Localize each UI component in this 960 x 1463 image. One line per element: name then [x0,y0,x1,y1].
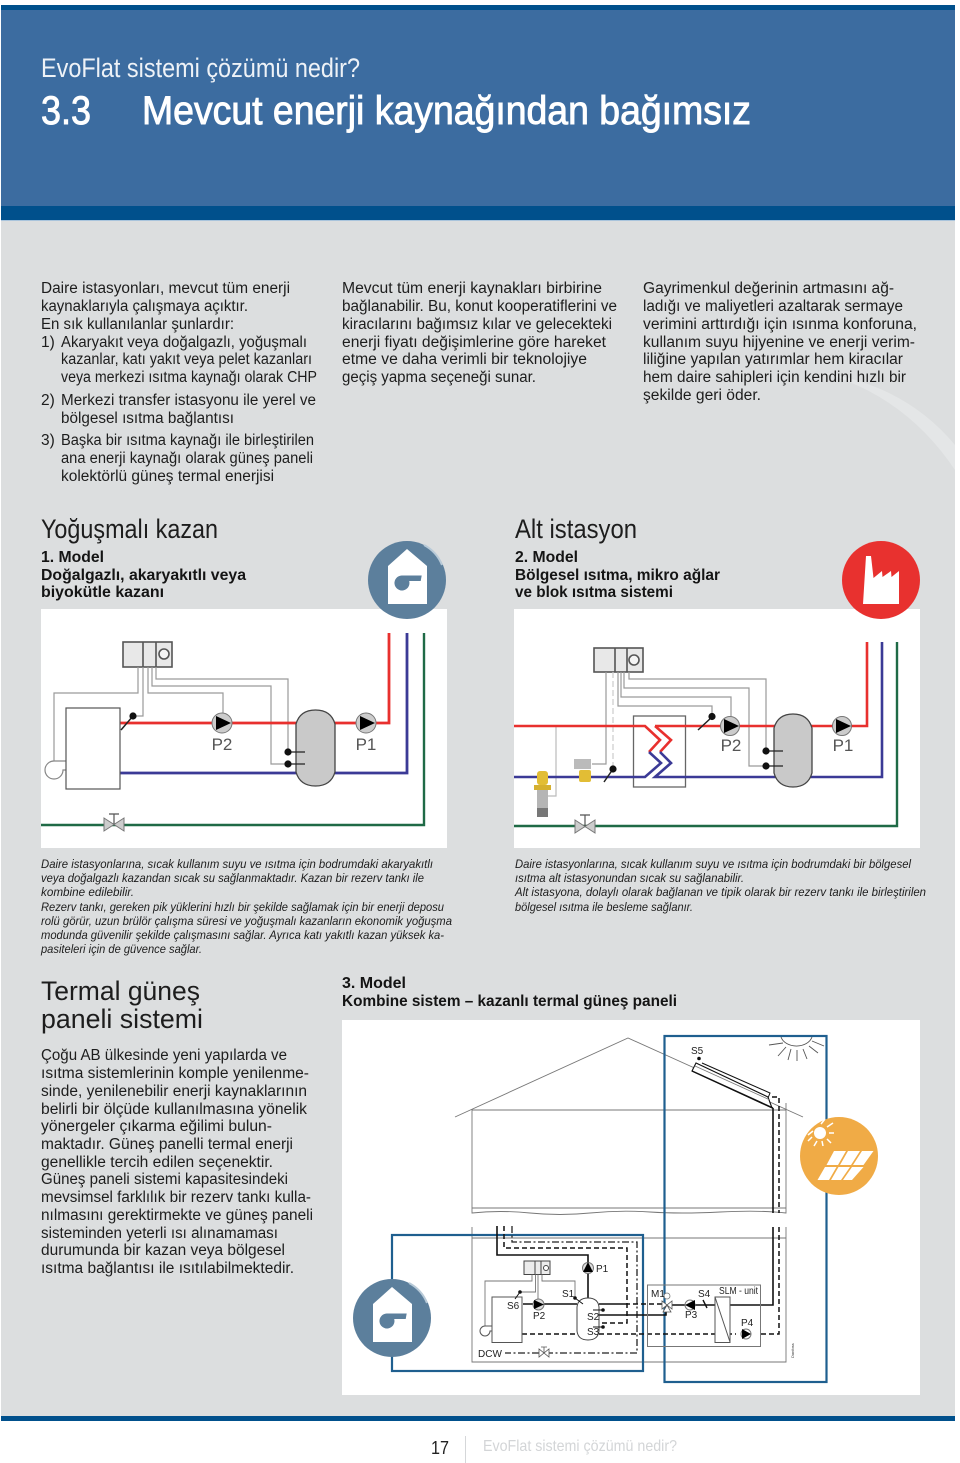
footer divider and running title: EvoFlat sistemi çözümü nedir? [483,1438,677,1455]
storage tank [762,714,812,787]
text block: model 2 description: ısıtma alt istasyonundan sıcak su sağlanabilir. [515,871,744,885]
text block: column 3: hem daire sahipleri için kendini hızlı bir [643,369,906,386]
footer band [1,1416,955,1421]
diagram labels: P2 [533,1311,546,1322]
heading: Termal güneş paneli sistemi: paneli sistemi [41,1004,203,1034]
pump P1 [832,716,853,755]
boiler circuit pipes [497,1226,736,1353]
pump P1: P1 [356,735,376,754]
text block: column 1: 1) [41,334,55,351]
diagram labels: P3 [685,1310,698,1321]
header band [1,5,955,221]
heading: Yoğuşmalı kazan: Yoğuşmalı kazan [41,514,218,544]
cold water pipe [514,642,897,826]
text block: model 1 description: kombine edilebilir. [41,885,134,899]
text block: model 2 description: bölgesel ısıtma ile besleme sağlanır. [515,900,693,914]
blue frame: boiler zone [392,1235,643,1371]
boiler [45,708,137,789]
title: Mevcut enerji kaynağından bağımsız [142,89,751,133]
pump P2: P2 [212,735,232,754]
text block: solar description: mevsimsel farklılık bir rezerv tankı kulla- [41,1189,311,1206]
text block: solar description: nılmasını gerektirmekte ve güneş paneli [41,1207,313,1224]
diagram labels [478,1264,795,1360]
text block: solar description: belirli bir ölçüde kullanılmasına yönelik [41,1101,307,1118]
text block: column 1: veya merkezi ısıtma kaynağı olarak CHP [61,369,317,386]
pump P1 [356,713,376,754]
subheading: model 3: 3. Model [342,975,406,992]
subheading: model 2: ve blok ısıtma sistemi [515,584,673,601]
pump P2: P2 [721,736,741,755]
controller [123,642,172,667]
sun outline [769,1037,824,1061]
pressure regulator [534,771,551,817]
diagram labels: S2 [587,1312,600,1323]
text block: column 2: etme ve daha verimli bir teknolojiye [342,351,587,368]
icon: solar panel badge [800,1117,878,1195]
motorised valve [574,759,591,782]
blue frame: solar zone [664,1036,826,1382]
subheading: model 2: 2. Model [515,549,578,566]
text block: model 2 description: Alt istasyona, dolaylı olarak bağlanan ve tipik olarak bir rezerv tankı ile birleştirilen [514,885,926,899]
text block: model 1 description [40,857,452,956]
text block: column 1: kaynaklarıyla çalışmaya açıktır. [41,298,248,315]
text block: column 3: ladığı ve maliyetleri azaltarak sermaye [643,298,903,315]
cold water pipe [41,633,424,825]
title: 3.3 [41,89,91,133]
solar collector: S5 [691,1046,704,1057]
subheading: model 1: 1. Model [41,549,104,566]
text block: column 2: geçiş yapma seçeneği sunar. [342,369,536,386]
boiler [480,1290,522,1342]
sensors [604,713,716,782]
text block: model 1 description: veya doğalgazlı kazandan sıcak su sağlanmaktadır. Kazan bir rezerv tankı ile [41,871,424,885]
control wires [548,672,766,796]
text block: column 1: Merkezi transfer istasyonu ile yerel ve [61,392,316,409]
subheading: model 1 [41,549,246,601]
controller and wires [485,1261,575,1326]
text block: model 2 description: Daire istasyonlarına, sıcak kullanım suyu ve ısıtma için bodrumdaki bir bölgesel [515,857,911,871]
solar tank [573,1296,605,1340]
text block: column 2: Mevcut tüm enerji kaynakları birbirine [342,280,602,297]
text block: column 1: ana enerji kaynağı olarak güneş paneli [61,450,313,467]
text block: column 1: bölgesel ısıtma bağlantısı [61,410,234,427]
subheading: model 2 [515,549,720,601]
text block: solar description: ısıtma bağlantısı ile ısıtılabilmektedir. [41,1260,294,1277]
panel: diagram model 1 [41,609,447,848]
diagram labels: M1 [651,1289,665,1300]
subheading: model 3 [342,975,677,1010]
text block: column 1 [41,280,317,485]
text block: column 1: 2) [41,392,55,409]
text block: column 3: Gayrimenkul değerinin artmasını ağ- [643,280,894,297]
subheading: model 2: Bölgesel ısıtma, mikro ağlar [515,567,720,584]
subheading: model 1: Doğalgazlı, akaryakıtlı veya [41,567,246,584]
text block: column 1: En sık kullanılanlar şunlardır: [41,316,234,333]
SLM unit [648,1285,760,1346]
text block: column 2 [342,280,617,386]
valve [104,814,124,831]
solar collector [691,1046,773,1108]
text block: column 3: verimini arttırdığı için ısınma konforuna, [643,316,917,333]
house outline [455,1038,803,1362]
diagram labels: S1 [562,1289,575,1300]
icon: boiler house badge (diagram 3) [353,1279,431,1357]
text block: column 1: 3) [41,432,55,449]
diagram labels: DCW [478,1349,502,1360]
heat exchanger [514,642,882,787]
text block: model 1 description: rolü görür, uzun brülör çalışma süresi ve yoğuşmalı kazanların ekonomik yoğuşma [41,914,452,928]
page number: 17 [431,1438,449,1458]
diagram labels: S3 [587,1327,600,1338]
text block: solar description [41,1047,313,1277]
diagram labels: SLM - unit [719,1286,758,1297]
diagram labels: Danfoss [790,1343,795,1358]
text block: model 2 description [514,857,926,914]
heading: Termal güneş paneli sistemi [41,976,203,1034]
DCW valve [539,1347,549,1357]
heading: Alt istasyon: Alt istasyon [515,514,637,544]
pump P1: P1 [833,736,853,755]
text block: column 3: şekilde geri öder. [643,387,761,404]
return pipe [120,633,407,773]
panel: diagram model 2 [514,609,920,848]
subheading: model 3: Kombine sistem – kazanlı termal güneş paneli [342,993,677,1010]
text block: solar description: maktadır. Güneş panelli termal enerji [41,1136,293,1153]
text block: column 1: kolektörlü güneş termal enerjisi [61,468,274,485]
solar flow and return pipes [730,1097,779,1334]
text block: solar description: Güneş paneli sistemi kapasitesindeki [41,1171,288,1188]
text block: solar description: yönergeler çıkarma eğilimi bulun- [41,1118,272,1135]
subheading: model 1: biyokütle kazanı [41,584,164,601]
header kicker: EvoFlat sistemi çözümü nedir? [41,53,360,83]
text block: solar description: Çoğu AB ülkesinde yeni yapılarda ve [41,1047,287,1064]
diagram labels: S4 [698,1289,711,1300]
text block: solar description: durumunda bir kazan veya bölgesel [41,1242,285,1259]
text block: column 1: Akaryakıt veya doğalgazlı, yoğuşmalı [61,334,307,351]
pumps P1 and P2 [533,1262,594,1310]
text block: solar description: genellikle tercih edilen seçenektir. [41,1154,273,1171]
hot pipe [120,633,389,723]
pump P2 [720,716,741,755]
text block: model 1 description: pasiteleri için de güvence sağlar. [40,942,202,956]
text block: column 3 [643,280,917,404]
text block: solar description: sisteminden yeterli ısı alınamaması [41,1225,278,1242]
text block: column 3: liliğine yapılan yatırımlar hem kiracılar [643,351,903,368]
panel: diagram model 3 [342,1020,920,1395]
text block: model 1 description: modunda güvenilir şekilde çalışmasını sağlar. Ayrıca katı yakıtlı kazan yüksek ka- [41,928,444,942]
text block: column 2: kiracılarını bağımsız kılar ve gelecekteki [342,316,612,333]
pump P2 [212,713,232,754]
text block: column 1: kazanlar, katı yakıt veya pelet kazanları [61,351,312,368]
text block: solar description: sinde, yenilenebilir enerji kaynaklarının [41,1083,307,1100]
text block: model 1 description: Daire istasyonlarına, sıcak kullanım suyu ve ısıtma için bodrumdaki akaryakıtlı [41,857,433,871]
text block: column 2: enerji fiyatı değişimlerine göre hareket [342,334,607,351]
text block: column 1: Daire istasyonları, mevcut tüm enerji [41,280,290,297]
text block: model 1 description: Rezerv tankı, gereken pik yüklerini hızlı bir şekilde sağlamak için bir enerji deposu [41,900,444,914]
diagram labels: S6 [507,1301,520,1312]
control wires [54,667,288,764]
diagram labels: P4 [741,1318,754,1329]
storage tank [284,710,335,786]
diagram labels: P1 [596,1264,609,1275]
text block: column 3: kullanım suyu hijyenine ve enerji verim- [643,334,915,351]
text block: solar description: ısıtma sistemlerinin komple yenilenme- [41,1065,309,1082]
heading: Termal güneş paneli sistemi: Termal güneş [41,976,200,1006]
icon: factory badge [842,541,920,619]
controller [594,648,643,672]
text block: column 1: Başka bir ısıtma kaynağı ile birleştirilen [61,432,314,449]
icon: boiler house badge [368,541,446,619]
text block: column 2: bağlanabilir. Bu, konut kooperatiflerini ve [342,298,617,315]
valve [575,815,595,833]
